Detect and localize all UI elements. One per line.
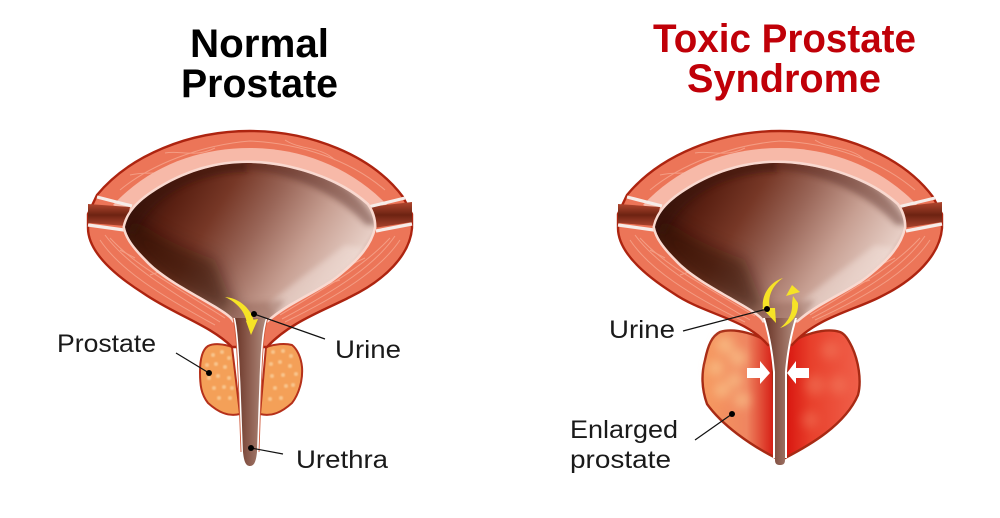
bladder wall — [88, 131, 412, 347]
label: Urine: Urine — [609, 316, 675, 344]
arrows: white compression — [747, 361, 809, 384]
bladder cavity — [120, 158, 378, 335]
title: Toxic Prostate Syndrome: Toxic Prostate — [653, 17, 916, 61]
title: Toxic Prostate Syndrome: Syndrome — [687, 57, 881, 101]
prostate lobes — [200, 344, 302, 415]
diagram: toxic prostate syndrome — [570, 131, 942, 474]
compressed urethra — [763, 318, 797, 465]
ureters — [88, 197, 412, 231]
bladder cavity — [650, 158, 908, 335]
title: Toxic Prostate Syndrome — [653, 17, 916, 101]
diagram: normal prostate — [57, 131, 412, 474]
bladder wall — [618, 131, 942, 345]
ureters — [618, 197, 942, 231]
label: Urine: Urine — [335, 336, 401, 364]
leader lines — [683, 309, 767, 440]
label: Prostate: Prostate — [57, 330, 156, 358]
label: Enlarged prostate — [570, 416, 678, 474]
urethra — [233, 318, 268, 466]
label: Enlarged prostate: Enlarged — [570, 416, 678, 444]
leader lines — [176, 314, 325, 454]
label: Urethra: Urethra — [296, 446, 388, 474]
enlarged prostate lobes — [703, 330, 860, 458]
title: Normal Prostate: Prostate — [181, 62, 338, 106]
arrow: urine flow — [225, 297, 258, 335]
title: Normal Prostate: Normal — [190, 22, 329, 66]
title: Normal Prostate — [181, 22, 338, 106]
arrow: urine backflow — [762, 278, 800, 328]
label: Enlarged prostate: prostate — [570, 446, 671, 474]
